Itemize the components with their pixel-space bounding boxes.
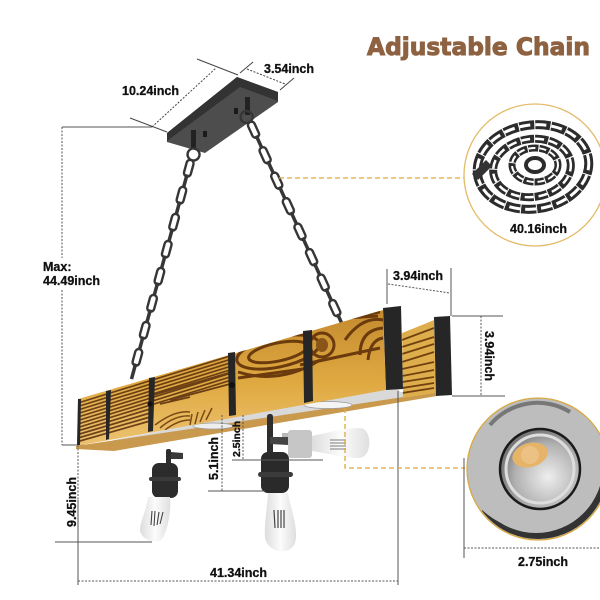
warm LED <box>510 439 550 471</box>
chain detail circle: 40.16inch <box>510 222 567 236</box>
lens <box>500 429 580 509</box>
dimension: 41.34inch overall length: 41.34inch <box>210 566 267 580</box>
silver underside strip <box>76 386 437 451</box>
dimension: 9.45inch bulb drop: 9.45inch <box>65 477 79 527</box>
dimension: 3.94inch beam width <box>387 268 451 316</box>
dimension: 5.1inch <box>207 415 265 491</box>
dimension: 9.45inch bulb drop <box>55 445 152 542</box>
spotlight detail circle <box>467 398 600 540</box>
dimension: 2.5inch: 2.5inch <box>231 421 243 457</box>
dimension: 5.1inch: 5.1inch <box>207 437 221 480</box>
dimension: 2.5inch <box>231 415 323 460</box>
dimension: 2.75inch spotlight: 2.75inch <box>518 555 568 569</box>
right chain <box>239 109 347 327</box>
centre pendant bulb <box>258 414 296 551</box>
dimension: 3.94inch beam height <box>452 316 505 396</box>
callout line: chain <box>279 177 466 179</box>
canopy plate <box>167 77 278 153</box>
wooden beam front face <box>77 310 386 446</box>
dimension: 3.94inch beam height: 3.94inch <box>482 331 496 381</box>
dimension: 2.75inch spotlight <box>464 458 600 569</box>
dimension: 3.94inch beam width: 3.94inch <box>393 269 443 283</box>
dimension: max height 44.49inch: 44.49inch <box>43 274 100 288</box>
title: Adjustable Chain <box>367 33 590 61</box>
left pendant bulb <box>140 449 183 541</box>
callout line: spotlight <box>345 408 465 468</box>
coiled chain <box>472 118 594 216</box>
dimension: max height 44.49inch <box>43 127 152 445</box>
dimension: max height 44.49inch: Max: <box>43 260 71 274</box>
metal bands on beam <box>77 306 452 445</box>
left chain <box>127 147 201 381</box>
dimension: canopy width 3.54inch: 3.54inch <box>264 62 314 76</box>
dimension: canopy width 3.54inch <box>240 62 314 90</box>
wooden beam rear section <box>402 320 436 398</box>
dimension: canopy length 10.24inch <box>122 59 238 132</box>
rear faded bulb <box>282 428 369 458</box>
chain detail circle <box>464 104 600 246</box>
dimension: canopy length 10.24inch: 10.24inch <box>122 84 179 98</box>
